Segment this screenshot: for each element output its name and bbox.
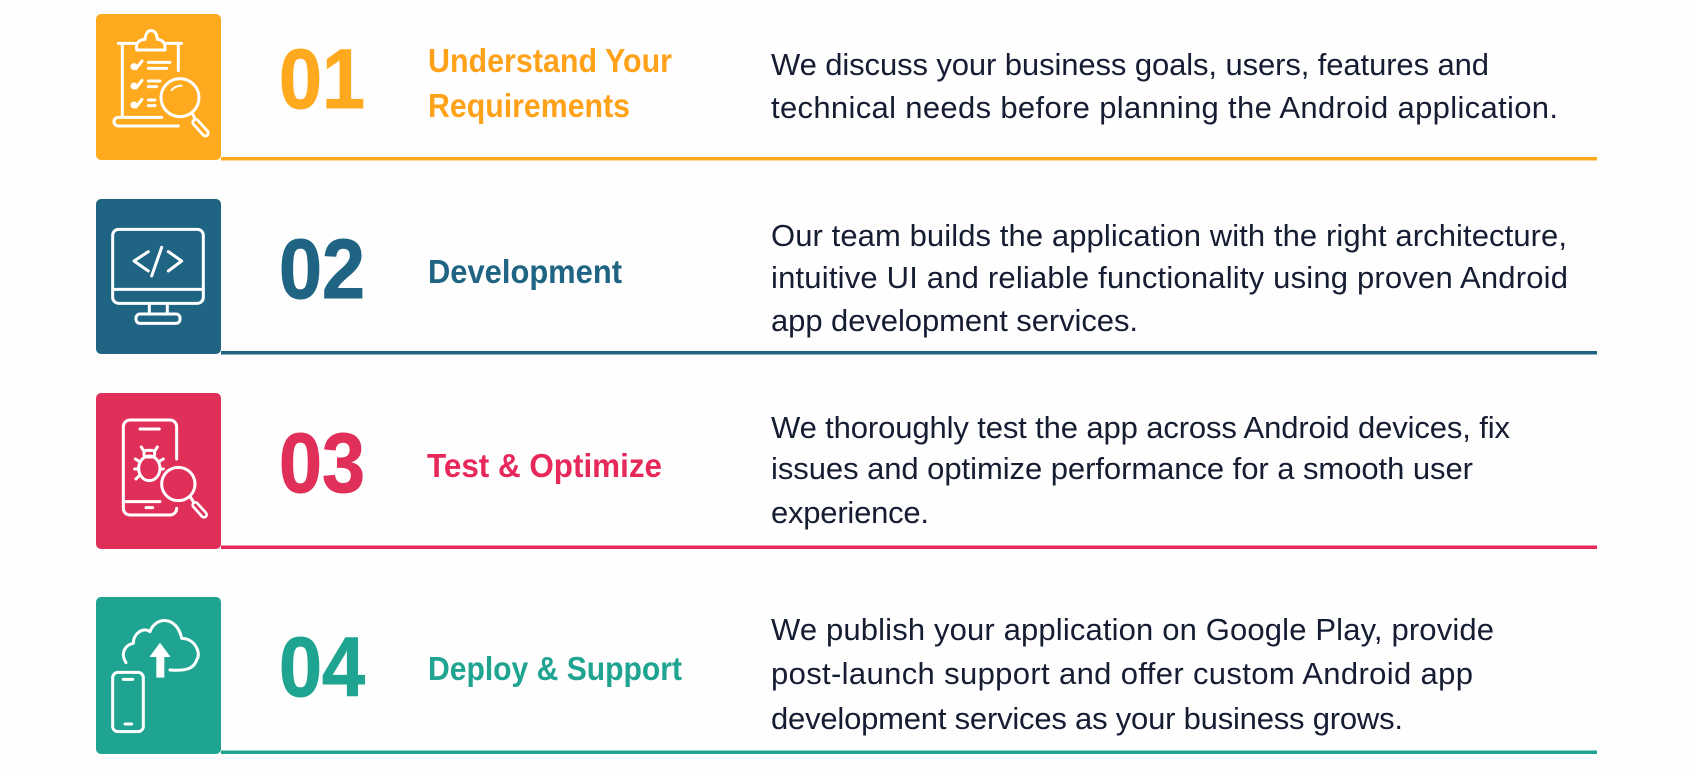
icon: cloud upload with phone — [113, 621, 198, 732]
rule: step 1 — [221, 157, 1597, 160]
heading: Understand Your Requirements: Understand Your — [428, 42, 672, 79]
number: 04: 04 — [279, 620, 365, 714]
description: step 4: We publish your application on Google Play, provide — [771, 612, 1494, 647]
description: step 3: We thoroughly test the app across Android devices, fix — [771, 410, 1510, 445]
panel: step 1 — [96, 14, 1597, 160]
heading: Understand Your Requirements: Requirements — [428, 87, 630, 124]
heading: Development: Development — [428, 253, 622, 290]
panel: step 4 — [96, 597, 1597, 754]
icon tile: step 1 — [96, 14, 221, 160]
description: step 3: experience. — [771, 495, 929, 530]
description: step 2: app development services. — [771, 303, 1138, 338]
icon: phone with bug and magnifier — [123, 420, 204, 515]
heading: Test & Optimize: Test & Optimize — [427, 447, 662, 484]
description: step 4: post-launch support and offer custom Android app — [771, 656, 1473, 691]
heading: Deploy & Support: Deploy & Support — [428, 650, 682, 687]
description: step 3 — [771, 410, 1510, 530]
heading: Understand Your Requirements — [428, 42, 672, 124]
description: step 3: issues and optimize performance for a smooth user — [771, 451, 1473, 486]
icon tile: step 3 — [96, 393, 221, 549]
description: step 1 — [771, 47, 1558, 125]
rule: step 2 — [221, 351, 1597, 354]
rule: step 4 — [221, 750, 1597, 754]
description: step 4: development services as your business grows. — [771, 701, 1403, 736]
number: 01: 01 — [279, 32, 365, 126]
description: step 4 — [771, 612, 1494, 736]
panel: step 3 — [96, 393, 1597, 549]
icon tile: step 2 — [96, 199, 221, 354]
rule: step 3 — [221, 546, 1597, 549]
description: step 1: We discuss your business goals, users, features and — [771, 47, 1489, 82]
description: step 2: intuitive UI and reliable functionality using proven Android — [771, 260, 1568, 295]
description: step 2 — [771, 218, 1568, 338]
icon tile: step 4 — [96, 597, 221, 754]
icon: monitor with code — [113, 229, 203, 323]
icon: clipboard with magnifier — [114, 31, 205, 133]
description: step 2: Our team builds the application with the right architecture, — [771, 218, 1567, 253]
number: 02: 02 — [279, 222, 365, 316]
description: step 1: technical needs before planning the Android application. — [771, 90, 1558, 125]
number: 03: 03 — [279, 416, 365, 510]
panel: step 2 — [96, 199, 1597, 354]
